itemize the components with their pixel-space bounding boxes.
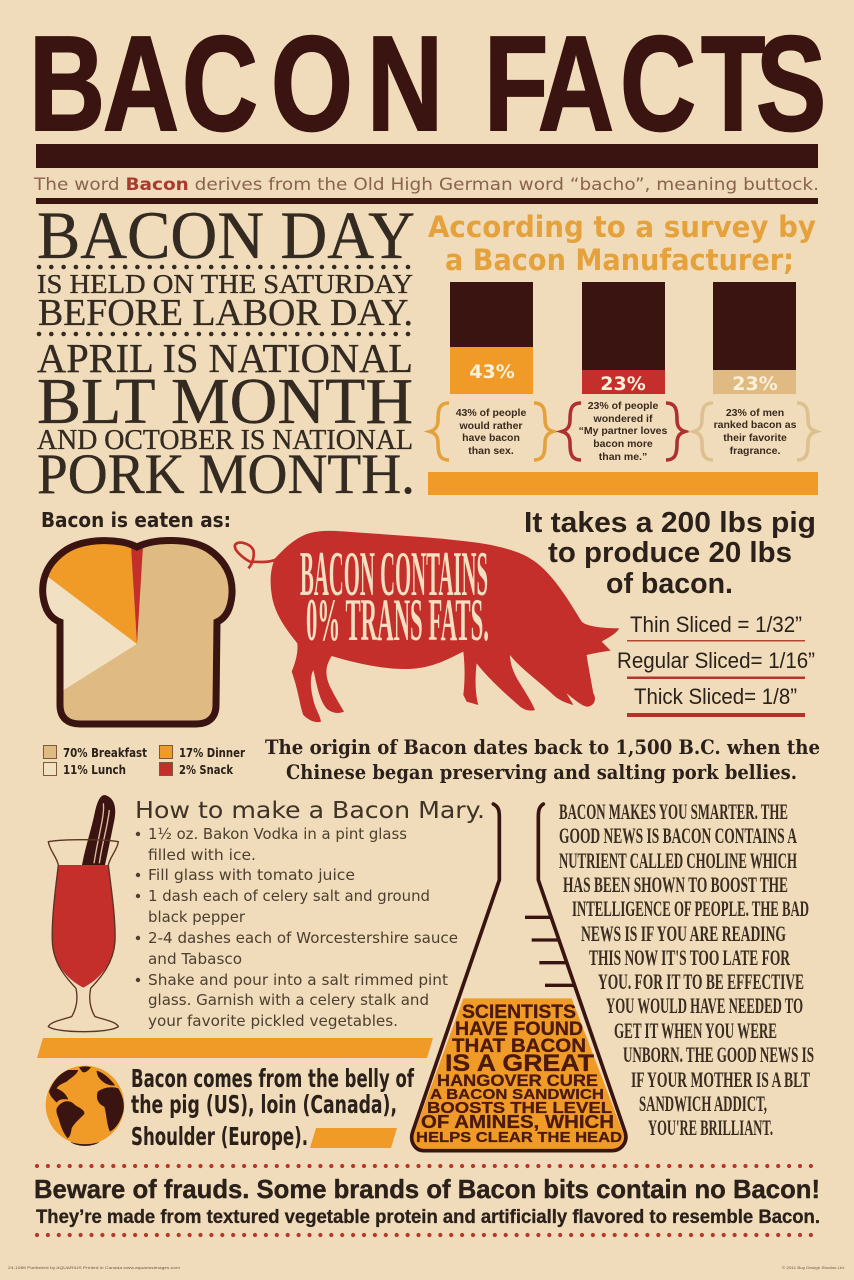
panel: bacon day headlines: AND OCTOBER IS NATIONAL (37, 425, 413, 456)
callout: beware of frauds: They’re made from textured vegetable protein and artificially flavored to resemble Bacon. (36, 1207, 820, 1228)
panel: bacon day headlines: APRIL IS NATIONAL (37, 335, 413, 381)
text: bacon cuts by region (131, 1064, 415, 1151)
panel: bacon day headlines: BEFORE LABOR DAY. (38, 292, 413, 334)
panel: bacon mary recipe: 1½ oz. Bakon Vodka in a pint glass (148, 825, 407, 843)
survey heading: a Bacon Manufacturer; (445, 243, 794, 277)
panel: survey bar 43 percent: 43% of people (456, 407, 526, 419)
illustration: flask with hangover text: A BACON SANDWICH (430, 1086, 604, 1103)
list: slice thickness: Thin Sliced = 1/32” (630, 612, 802, 637)
panel: bacon mary recipe: filled with ice. (148, 846, 256, 864)
panel: survey bar 23 percent partner: 23% (600, 373, 646, 395)
illustration: flask with hangover text: IS A GREAT (445, 1050, 594, 1077)
subtitle: The word Bacon derives from the Old High German word “bacho”, meaning buttock. (33, 175, 819, 195)
text: pig yield (524, 507, 816, 600)
small orange slanted band (310, 1128, 397, 1148)
illustration: pig silhouette: 0% TRANS FATS. (306, 587, 489, 653)
illustration: flask with hangover text: HANGOVER CURE (437, 1071, 598, 1090)
list: slice thickness: Thick Sliced= 1/8” (634, 684, 797, 709)
panel: bacon day headlines: BLT MONTH (37, 365, 413, 438)
panel: survey bar 23 percent fragrance: 23% (732, 373, 778, 395)
panel: bacon mary recipe: black pepper (148, 908, 246, 926)
panel: bacon day headlines: BACON DAY (37, 197, 415, 273)
panel: bacon mary recipe (135, 798, 485, 1030)
illustration: flask with hangover text: BOOSTS THE LEVEL (427, 1100, 612, 1117)
heading: bacon is eaten as: Bacon is eaten as: (41, 508, 231, 532)
icon: bloody mary glass (48, 795, 118, 1032)
illustration: flask with hangover text: THAT BACON (452, 1036, 586, 1057)
panel: survey bar 23 percent partner: wondered if (593, 413, 653, 425)
text: pig yield: It takes a 200 lbs pig (524, 507, 816, 539)
illustration: flask with hangover text (412, 804, 626, 1151)
callout: beware of frauds (34, 1174, 820, 1228)
illustration: flask with hangover text: OF AMINES, WHICH (421, 1112, 614, 1132)
footer credits (8, 1265, 845, 1270)
text: bacon cuts by region: the pig (US), loin (Canada), (131, 1090, 397, 1119)
orange slanted band (37, 1038, 433, 1058)
panel: bacon mary recipe: Shake and pour into a salt rimmed pint (148, 971, 448, 989)
subtitle rule (36, 198, 818, 204)
panel: survey bar 23 percent fragrance: their favorite (723, 432, 787, 444)
footer credits: © 2011 Buy Design Studios Ltd. (782, 1265, 845, 1270)
panel: survey bar 23 percent partner (562, 282, 685, 463)
text: origin of bacon: Chinese began preserving and salting pork bellies. (286, 760, 797, 784)
illustration: flask with hangover text: HELPS CLEAR THE HEAD (416, 1129, 622, 1146)
panel: survey bar 23 percent fragrance: 23% of men (726, 407, 784, 419)
text: bacon cuts by region: Bacon comes from the belly of (131, 1064, 415, 1093)
panel: survey bar 43 percent (430, 282, 553, 460)
panel: survey bar 23 percent partner: 23% of people (588, 400, 658, 412)
text block: bacon makes you smarter: SANDWICH ADDICT, (639, 1091, 767, 1116)
panel: survey bar 23 percent fragrance: fragrance. (730, 445, 780, 457)
panel: bacon mary recipe: your favorite pickled vegetables. (148, 1012, 398, 1030)
text block: bacon makes you smarter (559, 799, 814, 1140)
list: slice thickness: Regular Sliced= 1/16” (617, 648, 815, 673)
panel: bacon mary recipe: and Tabasco (148, 950, 242, 968)
legend (44, 745, 246, 777)
panel: bacon mary recipe: glass. Garnish with a celery stalk and (148, 991, 429, 1009)
illustration: flask with hangover text: SCIENTISTS (462, 1002, 576, 1023)
panel: survey bar 23 percent fragrance: ranked bacon as (714, 419, 797, 431)
legend: 11% Lunch (63, 762, 126, 777)
panel: survey bar 23 percent partner: than me.” (599, 451, 647, 463)
panel: survey bar 43 percent: 43% (469, 361, 515, 383)
panel: bacon mary recipe: How to make a Bacon Mary. (135, 798, 485, 824)
survey heading (428, 210, 816, 277)
panel: survey bar 43 percent: than sex. (468, 445, 514, 457)
panel: bacon day headlines (37, 197, 415, 506)
text: pig yield: to produce 20 lbs (548, 537, 792, 569)
panel: survey bar 43 percent: would rather (458, 420, 523, 432)
panel: survey bar 43 percent: have bacon (462, 432, 520, 444)
title: BACON FACTS (29, 7, 826, 159)
panel: bacon mary recipe: 2-4 dashes each of Worcestershire sauce (148, 929, 458, 947)
survey heading: According to a survey by (428, 210, 816, 244)
panel: bacon day headlines: PORK MONTH. (37, 443, 415, 506)
legend: 2% Snack (179, 762, 234, 777)
panel: bacon day headlines: IS HELD ON THE SATURDAY (37, 269, 413, 299)
panel: bacon mary recipe: 1 dash each of celery salt and ground (148, 887, 430, 905)
chart: bread pie (39, 537, 236, 728)
callout: beware of frauds: Beware of frauds. Some brands of Bacon bits contain no Bacon! (34, 1174, 820, 1204)
footer credits: 24-1089 Published by AQUARIUS Printed in Canada www.aquariusimages.com (8, 1265, 181, 1270)
illustration: flask with hangover text: HAVE FOUND (455, 1019, 583, 1040)
title bar (36, 144, 818, 168)
icon: globe (46, 1066, 124, 1146)
panel: survey bar 23 percent partner: bacon more (593, 438, 653, 450)
panel: survey bar 23 percent fragrance (694, 282, 816, 460)
panel: bacon mary recipe: Fill glass with tomato juice (148, 866, 355, 884)
text: bacon cuts by region: Shoulder (Europe). (131, 1122, 308, 1151)
illustration: pig silhouette (235, 531, 619, 722)
legend: 17% Dinner (179, 745, 246, 760)
list: slice thickness (617, 612, 815, 717)
text: origin of bacon (265, 735, 820, 784)
panel: survey bar 23 percent partner: “My partner loves (579, 425, 668, 437)
text: pig yield: of bacon. (606, 568, 733, 600)
legend: 70% Breakfast (63, 745, 147, 760)
orange band (428, 472, 818, 495)
